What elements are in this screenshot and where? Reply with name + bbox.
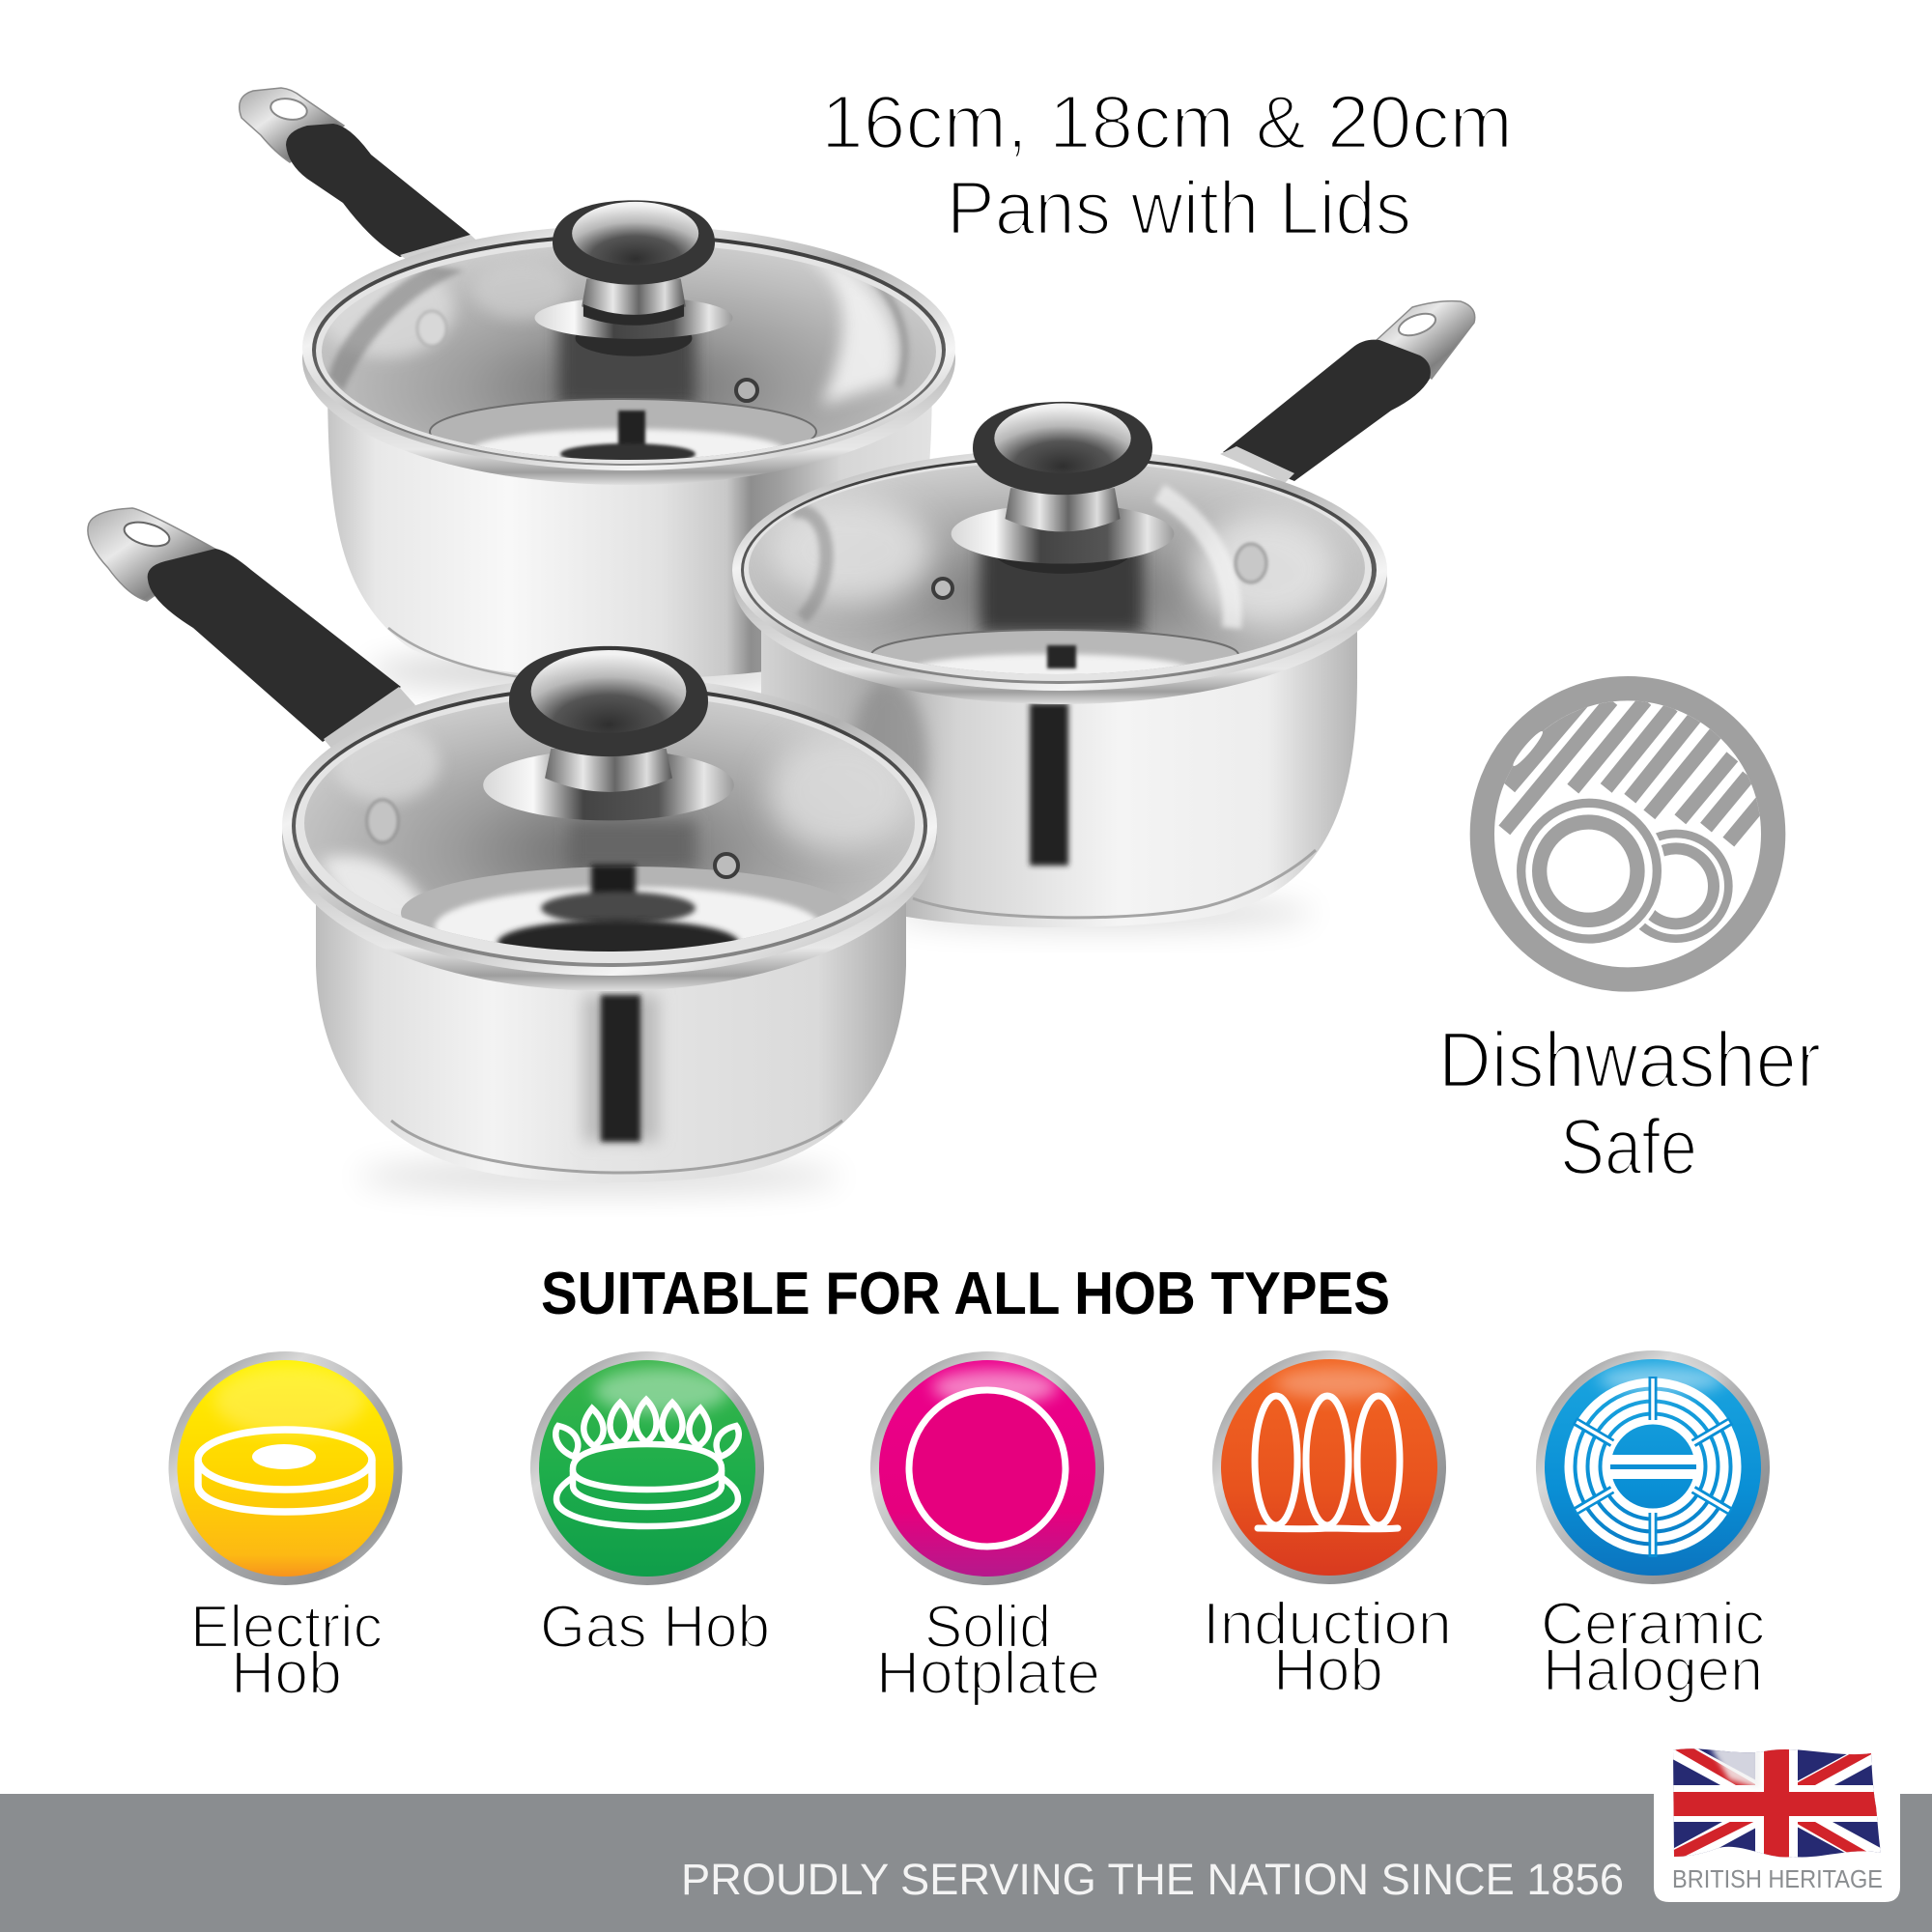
- medium pan left reflection: [850, 681, 927, 845]
- small pan lid rivet: [715, 854, 738, 877]
- small pan dark reflection: [583, 995, 659, 1142]
- medium pan glass lid: [749, 466, 1365, 674]
- small pan knob: [483, 646, 734, 820]
- icon: gas hob: [530, 1351, 764, 1585]
- ceramic halogen label: Ceramic: [1541, 1591, 1765, 1658]
- dishwasher safe label: [1438, 1016, 1821, 1191]
- large pan base edge: [388, 628, 696, 686]
- icon: induction hob: [1212, 1350, 1446, 1584]
- electric hob label: Electric: [190, 1594, 383, 1661]
- solid hotplate label: Hotplate: [876, 1640, 1100, 1707]
- large pan lid vent: [417, 311, 446, 346]
- ceramic halogen label: [1541, 1591, 1765, 1704]
- large pan handle: [240, 88, 483, 266]
- medium pan handle: [1220, 301, 1475, 483]
- ceramic halogen label: Halogen: [1543, 1637, 1763, 1704]
- small front saucepan: [88, 508, 937, 1192]
- gas hob label: Gas Hob: [540, 1594, 770, 1661]
- hob types row: [168, 1350, 1770, 1707]
- small pan body: [316, 840, 906, 1182]
- induction hob label: [1203, 1591, 1452, 1704]
- medium pan lid vent: [1236, 544, 1266, 582]
- small pan lid vent: [367, 800, 398, 842]
- large pan lid rivet: [736, 380, 757, 401]
- saucepan set photo: [88, 88, 1475, 1192]
- small pan shadow: [357, 1161, 840, 1192]
- small pan lip: [282, 682, 937, 991]
- small pan handle: [88, 508, 415, 752]
- medium pan body: [761, 580, 1357, 927]
- medium pan rim: [732, 449, 1387, 691]
- solid hotplate label: Solid: [924, 1594, 1051, 1661]
- title: [821, 79, 1513, 250]
- badge caption: BRITISH HERITAGE: [1672, 1864, 1883, 1893]
- dishwasher safe label: Safe: [1560, 1103, 1697, 1191]
- footer band: [0, 1794, 1932, 1932]
- footer slogan: PROUDLY SERVING THE NATION SINCE 1856: [681, 1855, 1624, 1904]
- badge panel: [1654, 1787, 1900, 1902]
- title: Pans with Lids: [947, 165, 1411, 250]
- induction hob label: Induction: [1203, 1591, 1452, 1658]
- medium pan lid rivet: [933, 579, 952, 598]
- small pan glass lid: [304, 701, 915, 952]
- large pan body: [327, 367, 932, 678]
- induction hob label: Hob: [1273, 1637, 1383, 1704]
- icon: dishwasher safe: [1482, 689, 1774, 980]
- icon: electric hob: [168, 1351, 402, 1585]
- large back saucepan: [240, 88, 955, 691]
- large pan glass lid: [322, 247, 936, 460]
- icon: solid hotplate: [870, 1351, 1104, 1585]
- title: 16cm, 18cm & 20cm: [821, 79, 1513, 164]
- electric hob label: Hob: [231, 1640, 342, 1707]
- medium pan knob: [952, 402, 1174, 574]
- icon: union jack flag: [1673, 1748, 1881, 1857]
- heading: SUITABLE FOR ALL HOB TYPES: [541, 1261, 1390, 1327]
- medium right saucepan: [732, 301, 1475, 928]
- medium pan shadow: [889, 897, 1314, 928]
- british heritage badge: [1654, 1739, 1900, 1902]
- solid hotplate label: [876, 1594, 1100, 1707]
- medium pan base edge: [913, 850, 1316, 918]
- large pan shadow: [367, 652, 811, 691]
- large pan rim: [302, 225, 955, 470]
- small pan base edge: [391, 1121, 842, 1173]
- small pan rim: [282, 676, 937, 976]
- large pan lip: [302, 234, 955, 485]
- medium pan dark reflection: [1030, 703, 1068, 866]
- medium pan lip: [732, 455, 1387, 704]
- dishwasher safe label: Dishwasher: [1438, 1016, 1821, 1104]
- large pan knob: [535, 200, 732, 356]
- icon: ceramic halogen: [1536, 1350, 1770, 1584]
- electric hob label: [190, 1594, 383, 1707]
